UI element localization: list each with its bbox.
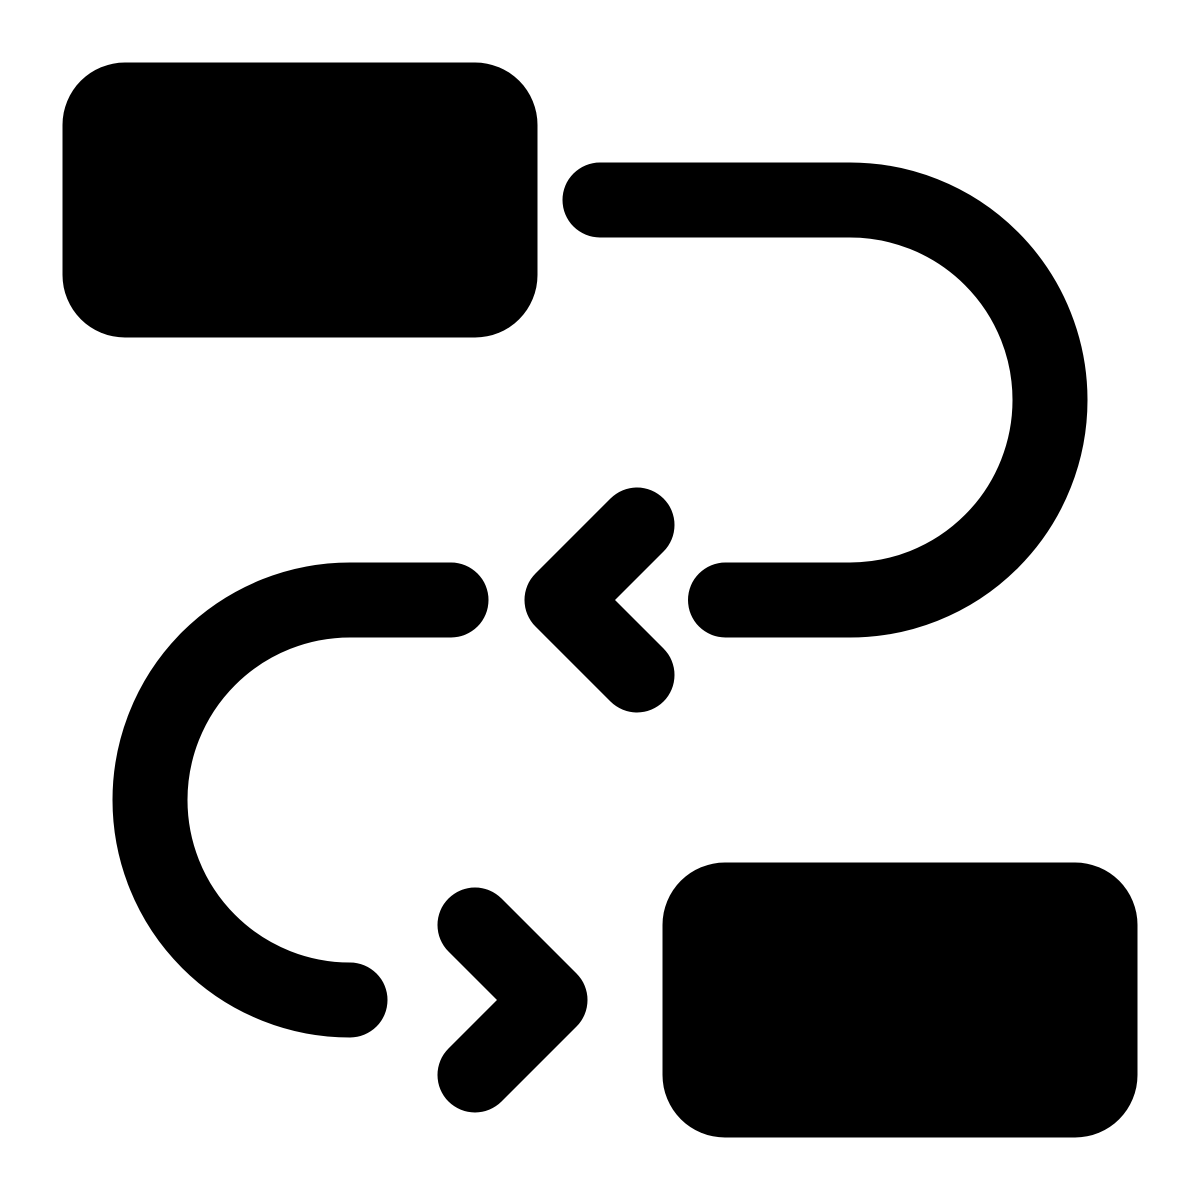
lower connector curve <box>150 600 451 1000</box>
start box <box>62 62 538 338</box>
right-pointing arrowhead <box>475 925 550 1075</box>
end box <box>662 862 1138 1138</box>
left-pointing arrowhead <box>562 525 637 675</box>
upper connector curve <box>600 200 1050 600</box>
